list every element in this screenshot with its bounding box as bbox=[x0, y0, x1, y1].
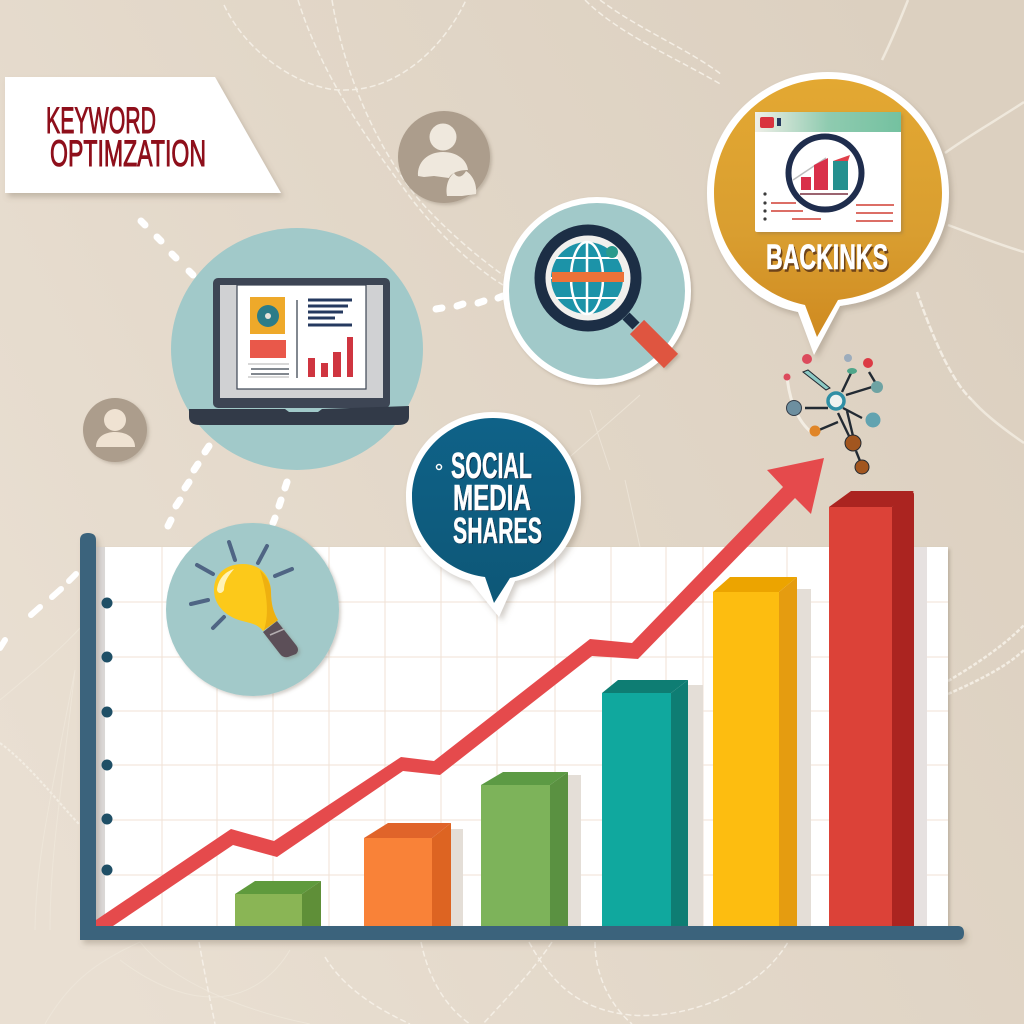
callout: social media shares: SHARES bbox=[454, 511, 543, 552]
bar shadows bbox=[451, 589, 811, 926]
chart axes bbox=[80, 533, 964, 940]
globe bbox=[551, 242, 624, 314]
bulb glass bbox=[214, 564, 278, 631]
panel: lightbulb bbox=[166, 523, 339, 696]
bar 3 green bbox=[481, 772, 568, 926]
magnifier handle bbox=[626, 316, 671, 361]
callout: backlinks: BACKINKS bbox=[766, 238, 888, 277]
connector dashes bbox=[0, 221, 503, 648]
bar 4 teal bbox=[602, 680, 688, 926]
icon: network nodes bbox=[784, 354, 883, 474]
laptop frame bbox=[213, 278, 390, 408]
icon: user badge left bbox=[83, 398, 147, 462]
rays bbox=[191, 542, 292, 628]
bulb base bbox=[263, 621, 298, 657]
axis tick dots bbox=[102, 598, 112, 876]
panel: laptop bbox=[171, 228, 423, 470]
bar 2 orange bbox=[364, 823, 451, 926]
callout: social media shares bbox=[406, 412, 581, 617]
icon: users badge top bbox=[398, 111, 490, 203]
callout: social media shares: MEDIA bbox=[454, 478, 532, 519]
panel: magnifier globe bbox=[506, 200, 688, 382]
bar 1 green bbox=[235, 881, 321, 926]
bar 5 yellow bbox=[713, 577, 797, 926]
browser window bbox=[755, 112, 901, 232]
callout: social media shares: MEDIA bbox=[453, 477, 531, 518]
bar chart bbox=[235, 491, 914, 926]
screen content bbox=[248, 297, 353, 378]
bar 6 red bbox=[829, 491, 914, 926]
callout: social media shares: SHARES bbox=[453, 510, 542, 551]
label: keyword optimization: OPTIMZATION bbox=[50, 133, 206, 174]
chart grid paper bbox=[96, 547, 948, 927]
label: keyword optimization bbox=[5, 77, 281, 193]
label: keyword optimization: KEYWORD bbox=[46, 100, 156, 141]
growth arrow bbox=[96, 458, 824, 926]
callout: social media shares: SOCIAL bbox=[451, 445, 532, 486]
backlinks text: BACKINKS bbox=[768, 240, 890, 280]
callout: social media shares: SOCIAL bbox=[452, 446, 533, 487]
laptop base bbox=[189, 406, 409, 425]
callout: backlinks bbox=[707, 72, 949, 355]
magnifier lens bbox=[540, 230, 636, 326]
